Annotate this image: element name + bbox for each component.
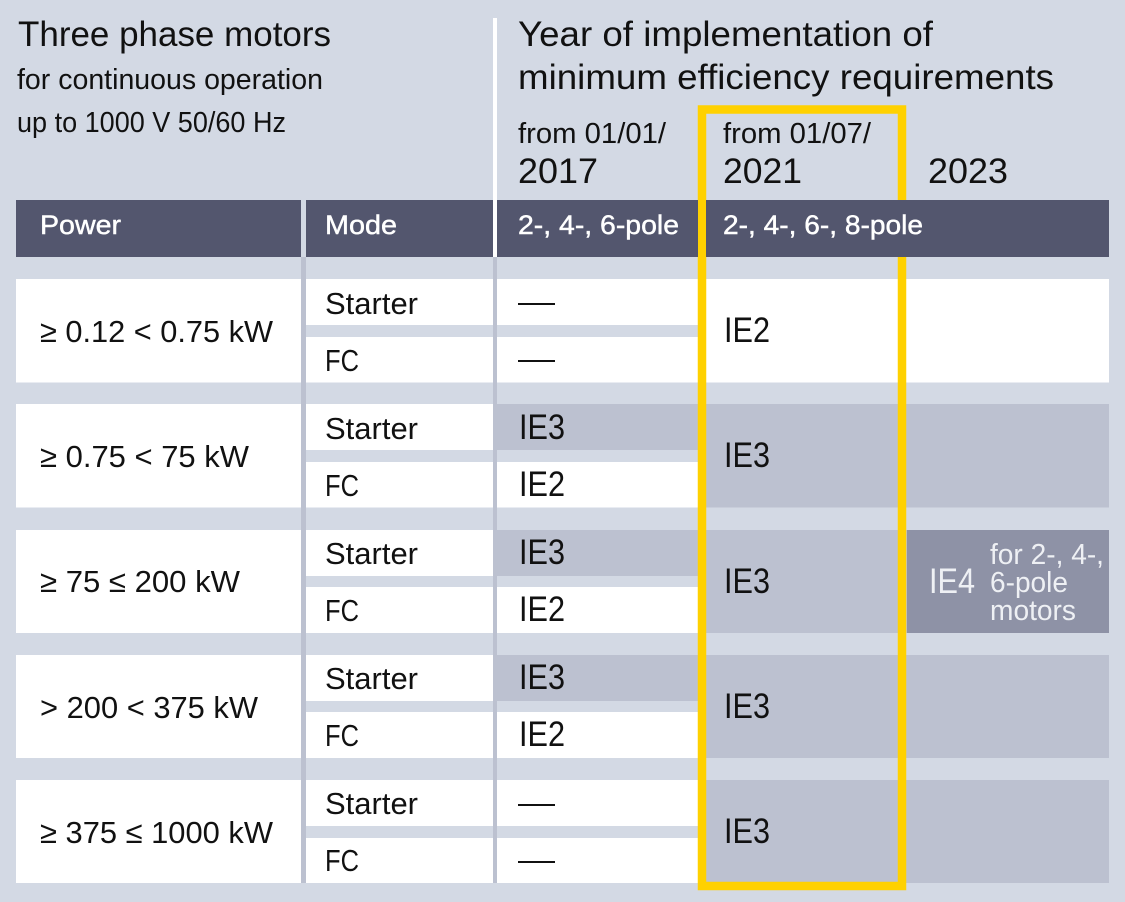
yellow highlight frame — [702, 110, 902, 886]
row 3 text: IE2 — [519, 589, 565, 629]
title: Three phase motors — [18, 14, 331, 54]
row 3 text: ≥ 75 ≤ 200 kW — [40, 564, 241, 599]
row 3 text: IE3 — [519, 532, 565, 572]
row 3 cells — [16, 530, 1109, 633]
row 2 cells — [16, 404, 1109, 508]
column date: 2021 — [723, 118, 871, 191]
mode labels: Starter — [325, 286, 418, 321]
row 2 text: Starter — [325, 411, 418, 446]
column date: 2021: from 01/07/ — [723, 118, 871, 150]
header: 2017 poles: 2-, 4-, 6-pole — [518, 210, 679, 240]
row 1 text — [40, 286, 770, 378]
row 2 text: IE2 — [519, 464, 565, 504]
row 5 cells — [16, 780, 1109, 883]
left title block — [17, 14, 331, 139]
row 2 text: FC — [325, 468, 359, 503]
row 5 text: ≥ 375 ≤ 1000 kW — [40, 815, 274, 850]
row 2 text: ≥ 0.75 < 75 kW — [40, 439, 250, 474]
row 3 text: Starter — [325, 536, 418, 571]
2017 dashes — [518, 304, 555, 361]
2017 dashes — [518, 805, 555, 862]
row 5 text: Starter — [325, 786, 418, 821]
header bar — [16, 200, 1109, 257]
row 4 text: IE3 — [519, 657, 565, 697]
subtitle line 1: for continuous operation — [17, 64, 323, 96]
row 2 text: IE3 — [519, 407, 565, 447]
row 3 text: IE3 — [724, 561, 770, 601]
row 3 text — [40, 532, 1104, 629]
row 2 text: IE3 — [724, 435, 770, 475]
row 1 cells — [16, 279, 1109, 382]
row 4 text: FC — [325, 718, 359, 753]
heading line 2: minimum efficiency requirements — [518, 57, 1054, 97]
IE4 callout: motors — [990, 595, 1076, 627]
header: mode: Mode — [325, 210, 397, 240]
right heading — [518, 14, 1054, 97]
row 4 text: > 200 < 375 kW — [40, 690, 259, 725]
row 1 text: FC — [325, 343, 359, 378]
header: 2021 poles: 2-, 4-, 6-, 8-pole — [723, 210, 923, 240]
column separators — [301, 18, 497, 883]
column date: 2023: 2023 — [928, 151, 1008, 191]
row 2 text — [40, 407, 770, 504]
row 3 text: FC — [325, 593, 359, 628]
column date: 2017: from 01/01/ — [518, 118, 666, 150]
header: power: Power — [40, 210, 121, 240]
row 4 text: IE3 — [724, 686, 770, 726]
IE4 callout: 6-pole — [990, 567, 1068, 599]
row 4 text: IE2 — [519, 714, 565, 754]
subtitle line 2: up to 1000 V 50/60 Hz — [17, 107, 286, 139]
row 5 text: IE3 — [724, 811, 770, 851]
row 4 text: Starter — [325, 661, 418, 696]
row 4 cells — [16, 655, 1109, 758]
IE4 callout: for 2-, 4-, — [990, 539, 1104, 571]
heading line 1: Year of implementation of — [518, 14, 933, 54]
column date: 2017: 2017 — [518, 151, 598, 191]
column date: 2021: 2021 — [723, 151, 802, 191]
row 5 text: FC — [325, 843, 359, 878]
IE4 callout: IE4 — [929, 561, 975, 601]
column date: 2017 — [518, 118, 666, 191]
2021 value: IE2 — [724, 310, 770, 350]
row 4 text — [40, 657, 770, 754]
IE4 callout — [929, 539, 1104, 627]
row 5 text — [40, 786, 770, 878]
power range: ≥ 0.12 < 0.75 kW — [40, 314, 274, 349]
